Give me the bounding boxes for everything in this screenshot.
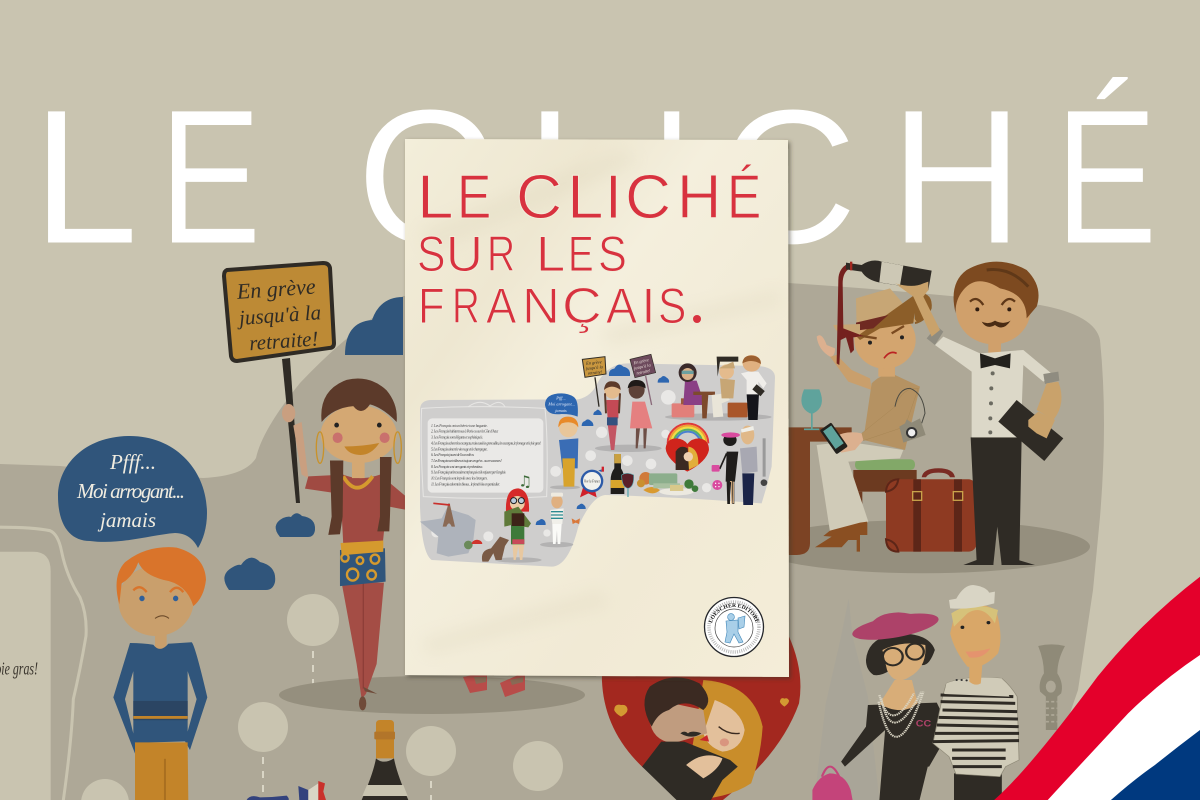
title line 3: Ç	[562, 278, 601, 334]
grey path blob	[420, 363, 775, 567]
mini waiter	[741, 355, 767, 420]
mini café scene	[672, 357, 748, 418]
mini woman in pink	[628, 380, 652, 448]
mini France map with Eiffel tower	[420, 503, 482, 557]
list frame with the eleven clichés: 3. Les Français sont élégants et sophistiqués.	[431, 436, 483, 440]
mini braided woman	[604, 381, 621, 450]
title line 3: N	[522, 278, 559, 334]
wine bottle	[846, 261, 932, 293]
title line 3: S	[658, 278, 687, 334]
large background title: É	[1055, 69, 1157, 284]
list frame with the eleven clichés: 8. Les Français sont arrogants et prétentieux.	[431, 465, 483, 469]
title line 2: U	[446, 226, 483, 282]
figure: sailor in striped shirt	[933, 585, 1019, 800]
mini heart with rainbow	[666, 424, 709, 472]
blue clouds	[536, 365, 669, 525]
figure: lady in black with pearls	[812, 608, 950, 800]
title line 3: R	[452, 278, 479, 334]
mini protest signs: En grève	[632, 357, 649, 366]
small French flag and navy shape	[247, 781, 326, 800]
title line 2	[417, 226, 626, 282]
large background title: L	[525, 69, 632, 284]
mini protest signs: retraite!	[636, 368, 651, 376]
mini redhead with accordion	[504, 488, 531, 560]
mini rosette	[580, 467, 604, 497]
publisher seal	[704, 596, 764, 658]
background hill	[0, 283, 1104, 800]
champagne bottle	[362, 720, 408, 800]
list frame with the eleven clichés: 10. Les Français sont impolis avec les étrangers.	[431, 476, 488, 480]
mini zipper and button	[712, 438, 767, 490]
poster map illustration	[420, 354, 775, 567]
poster sheet	[405, 139, 789, 677]
title line 3: A	[486, 278, 517, 334]
large background title: I	[648, 69, 695, 284]
mini speech bubble	[545, 393, 578, 417]
waiter	[895, 262, 1063, 565]
large background title: C	[719, 69, 858, 284]
suitcase	[886, 468, 977, 552]
mini protest signs	[582, 354, 656, 407]
white stops	[431, 390, 711, 541]
title line 3: I	[642, 278, 655, 334]
title line 1: E	[457, 163, 491, 232]
title line 2: S	[417, 226, 445, 282]
list frame with the eleven clichés: 7. Les Français sont râleurs et toujours en grève... ou en vacances!	[431, 459, 502, 463]
clouds	[224, 297, 403, 590]
title line 1: C	[625, 163, 671, 232]
title line 1: I	[605, 163, 622, 232]
large background title	[32, 69, 1157, 284]
shadow under the two women	[279, 676, 585, 714]
list frame with the eleven clichés: 6. Les Français jouent de l'accordéon.	[431, 453, 474, 457]
large background title: E	[159, 69, 261, 284]
mini champagne, wine and food	[611, 454, 698, 497]
mini speech bubble: Moi arrogant...	[547, 402, 575, 407]
title line 1: H	[677, 163, 722, 232]
second woman's shoes	[463, 672, 525, 697]
speech bubble: boy: jamais	[97, 508, 156, 532]
list frame with the eleven clichés: 1. Les Français ont un béret et une baguette.	[431, 424, 488, 428]
list frame with the eleven clichés: 9. Les Français parlent seulement français et ils refusent par l'anglais	[431, 471, 506, 475]
list frame with the eleven clichés: 5. Les Français aiment le vin rouge et le champagne.	[431, 447, 488, 451]
tourist woman	[815, 288, 932, 552]
zipper	[1038, 644, 1065, 730]
speech bubble: boy: Moi arrogant...	[76, 479, 185, 503]
mini sailor	[550, 493, 564, 544]
dotted stops	[81, 594, 563, 800]
ghost tower behind the couple	[814, 598, 879, 800]
figure: red-haired boy	[113, 547, 207, 800]
mini protest signs: jusqu'à la	[633, 362, 651, 371]
tourist and waiter scene	[757, 261, 1090, 573]
title line 2: L	[536, 226, 565, 282]
speech bubble: boy: Pfff...	[109, 450, 156, 474]
list frame with the eleven clichés	[421, 402, 547, 498]
title line 2: S	[598, 226, 626, 282]
large background title: C	[356, 69, 495, 284]
title line 1: L	[417, 163, 454, 232]
large background title: L	[32, 69, 139, 284]
list frame with the eleven clichés: 2. Les Français habitent tous à Paris ou sur la Côte d'Azur.	[431, 430, 499, 434]
mini dog	[482, 537, 509, 562]
mini boy	[558, 417, 578, 487]
tricolore ribbon corner	[994, 577, 1200, 800]
title line 3	[418, 278, 701, 334]
mini protest signs: jusqu'à la	[585, 364, 603, 371]
mini speech bubble: Pfff...	[555, 395, 566, 400]
list frame with the eleven clichés: 11. Les Français adorent les bisous... le french kiss en particulier.	[431, 482, 500, 486]
mini protest signs: En grève	[585, 359, 602, 366]
stool and cushion	[853, 459, 917, 505]
title line 3: A	[606, 278, 637, 334]
protest sign	[224, 263, 334, 503]
heart with kissing couple	[602, 633, 800, 800]
list frame with the eleven clichés: 4. Les Français adorent les escargots, mais aussi les grenouilles, les escargots, le fromage et le foie gras!	[431, 442, 542, 447]
figure: lady in black with pearls: CC	[916, 719, 931, 729]
title line 1: É	[727, 163, 761, 232]
large background title: H	[890, 69, 1023, 284]
speech bubble: boy	[58, 436, 207, 548]
mini protest signs: retraite!	[588, 369, 603, 376]
mini lady and sailor	[712, 426, 758, 505]
table and wine glass	[788, 389, 852, 555]
mini rosette: Vive la France	[584, 479, 600, 484]
title line 2: E	[568, 226, 593, 282]
wine stream	[837, 263, 863, 365]
publisher seal: LOESCHER EDITORE	[708, 603, 760, 624]
protest sign: retraite!	[248, 326, 319, 355]
title line 2: R	[487, 226, 515, 282]
title line 1: L	[567, 163, 604, 232]
poster title	[417, 163, 761, 334]
mini speech bubble: jamais	[554, 408, 567, 413]
title line 3: F	[418, 278, 445, 334]
mini music notes: ♫	[518, 473, 532, 491]
protest sign: En grève	[235, 273, 317, 304]
figure: woman with braids	[282, 379, 405, 710]
title line 1	[417, 163, 761, 232]
mini butterfly	[572, 518, 580, 524]
title line 1: C	[516, 163, 562, 232]
decorative info panel at left	[0, 527, 86, 800]
protest sign: jusqu'à la	[235, 300, 322, 330]
shadows	[495, 413, 772, 563]
